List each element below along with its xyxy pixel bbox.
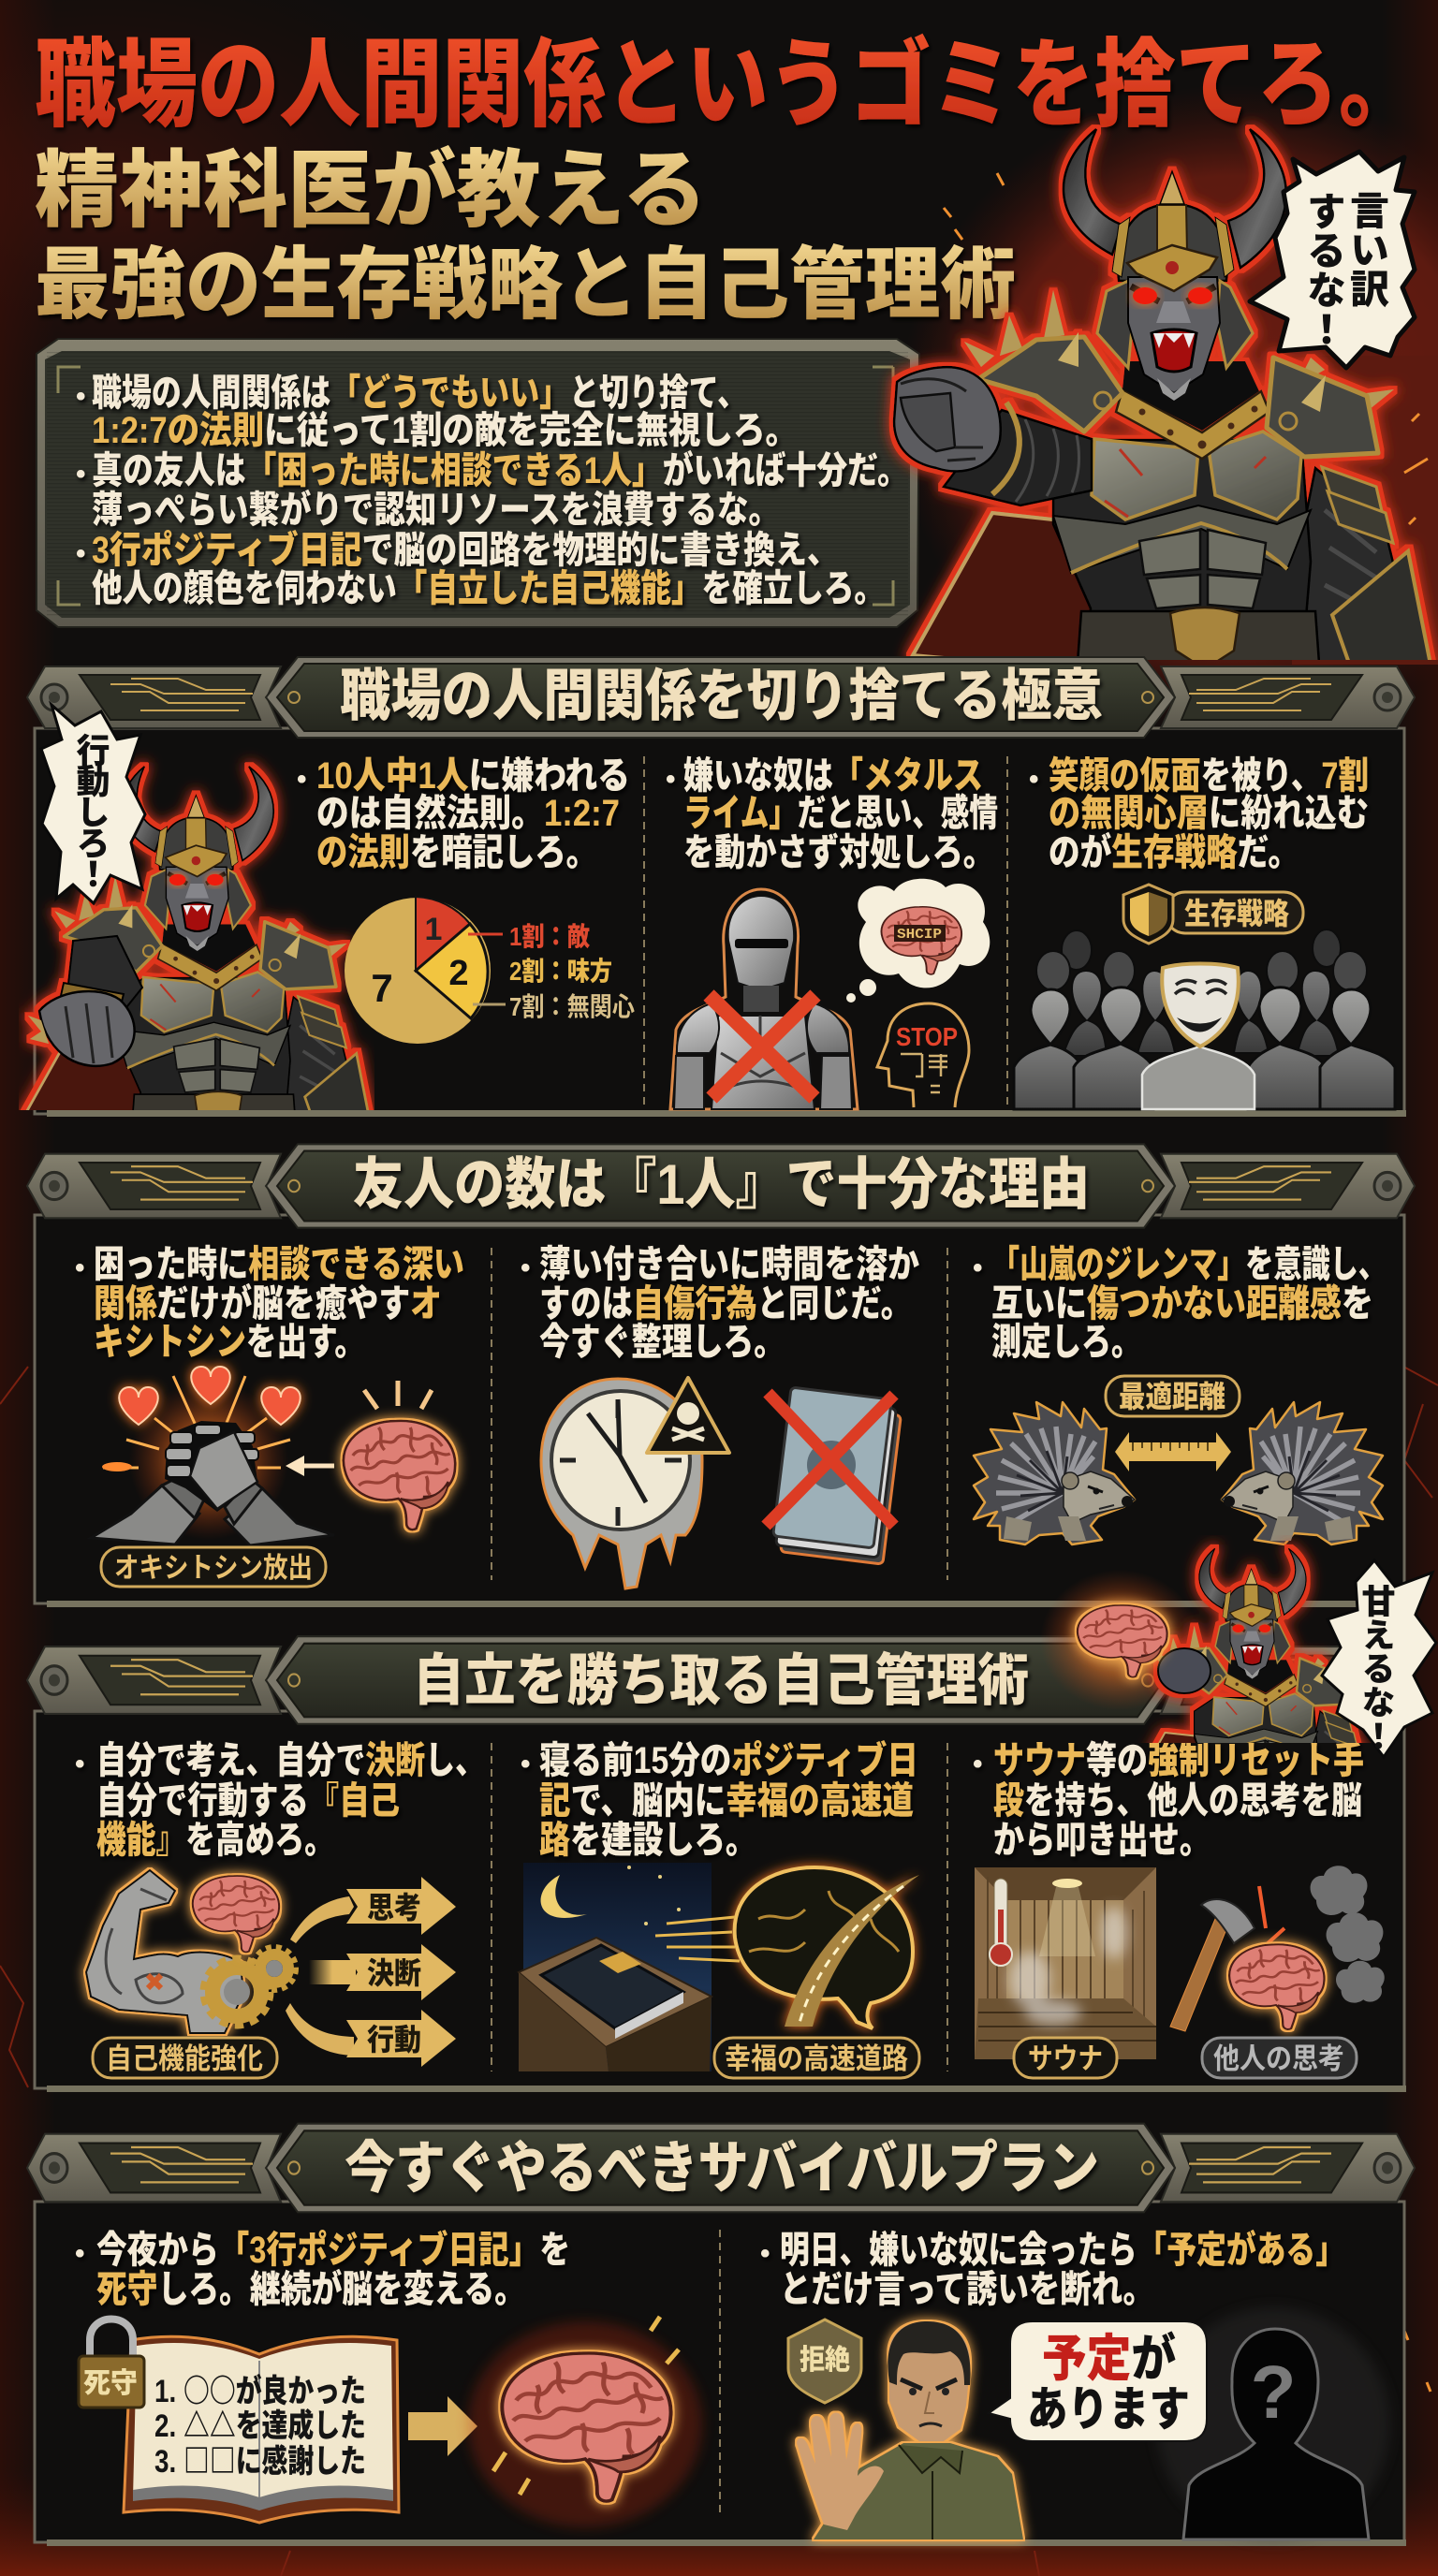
label: サウナ: サウナ (1028, 2042, 1103, 2075)
col 2 text: ライム」だと思い、感情 (683, 793, 998, 834)
summary text: 3行ポジティブ日記で脳の回路を物理的に書き換え、 (92, 529, 839, 571)
title: main headline (35, 31, 1420, 329)
col 3 text: サウナ等の強制リセット手 (993, 1740, 1364, 1781)
col 2 text: 寝る前15分のポジティブ日 (539, 1739, 918, 1781)
icon: head with STOP (877, 1003, 969, 1107)
icon: metal robot crossed out (670, 889, 858, 1109)
col 1 text: のは自然法則。1:2:7 (316, 793, 620, 834)
burst: 行動しろ！: 行動しろ！ (71, 733, 110, 887)
col 1 text: • (75, 1252, 85, 1283)
col 3 text: から叩き出せ。 (993, 1820, 1211, 1861)
col 3 text: 測定しろ。 (991, 1322, 1141, 1363)
icon: thought cloud with brain (846, 879, 990, 1003)
warrior with fist (20, 767, 373, 1138)
icon: thought clouds (1311, 1866, 1385, 2003)
icon: hedgehog right (1222, 1402, 1383, 1544)
label: オキシトシン放出: オキシトシン放出 (114, 1553, 313, 1584)
arrows: 思考 決断 行動 (286, 1877, 456, 2067)
burst: 甘えるな！ (1322, 1560, 1436, 1757)
icon: melting clock (541, 1379, 702, 1588)
summary text (76, 373, 908, 609)
rays above brain (364, 1381, 432, 1409)
col 1 text: 自分で行動する『自己 (96, 1780, 400, 1822)
col 2 text: • (521, 1252, 531, 1283)
col 2 text: 今すぐ整理しろ。 (539, 1322, 785, 1363)
col 2 text (521, 1739, 918, 1861)
left text: 死守しろ。継続が脳を変える。 (96, 2268, 525, 2310)
book lines (154, 2365, 366, 2481)
icon: brain struck (1229, 1944, 1325, 2029)
man raising hand (797, 2321, 1023, 2539)
label: 生存戦略 (1123, 885, 1303, 944)
label: 他人の思考: 他人の思考 (1213, 2042, 1344, 2075)
col 3 text: の無関心層に紛れ込む (1049, 793, 1369, 834)
col 2 text (521, 1244, 919, 1363)
section 3 header: 自立を勝ち取る自己管理術 (413, 1649, 1029, 1712)
col 1 text: 自分で考え、自分で決断し、 (96, 1740, 485, 1781)
section 2 header (27, 1144, 1415, 1228)
section 4 header (27, 2124, 1415, 2212)
col 1 text: 機能』を高めろ。 (96, 1820, 334, 1861)
icon: shield 拒絶: 拒絶 (800, 2345, 850, 2376)
pie chart 1:2:7: 7割：無関心 (509, 992, 635, 1021)
section 1 header (27, 657, 1415, 738)
icon: muscle arm with gears (86, 1870, 296, 2033)
label: 自己機能強化: 自己機能強化 (106, 2042, 263, 2075)
col 2 text: 嫌いな奴は「メタルス (683, 755, 983, 797)
icon: thought cloud with brain: SHCIP (897, 927, 942, 943)
summary text: 1:2:7の法則に従って1割の敵を完全に無視しろ。 (92, 410, 798, 451)
col 3 text: 互いに傷つかない距離感を (991, 1283, 1373, 1325)
col 1 text: の法則を暗記しろ。 (316, 832, 597, 873)
icon: hammer (1170, 1886, 1284, 2031)
col 3 text (973, 1740, 1364, 1861)
summary text: 薄っぺらい繋がりで認知リソースを浪費するな。 (92, 489, 780, 531)
col 1 text: 関係だけが脳を癒やすオ (94, 1282, 442, 1325)
burst: 甘えるな！: 甘えるな！ (1357, 1584, 1395, 1752)
col 1 text: • (297, 764, 307, 795)
section 4 header: 今すぐやるべきサバイバルプラン (345, 2137, 1099, 2200)
pie chart 1:2:7: 7 (371, 966, 393, 1010)
icon: ruler arrow (1115, 1432, 1231, 1471)
col 2 text: を動かさず対処しろ。 (683, 832, 994, 873)
icon: brain (193, 1876, 279, 1952)
section 3 header (27, 1636, 1415, 1724)
summary text: 真の友人は「困った時に相談できる1人」がいれば十分だ。 (92, 449, 908, 491)
icon: brain (344, 1421, 455, 1530)
col 3 text: のが生存戦略だ。 (1049, 831, 1299, 873)
panel: section 3 (27, 1636, 1415, 2092)
illustration: golden brain highway (735, 1867, 919, 2028)
silhouette with question mark: ? (1251, 2350, 1296, 2434)
speech bubble: あります (1027, 2383, 1190, 2436)
title line 3: 最強の生存戦略と自己管理術 (35, 241, 1016, 329)
illustration: sauna (975, 1867, 1156, 2059)
icon: hedgehog left (974, 1402, 1135, 1544)
left text (75, 2229, 570, 2310)
label: サウナ (1014, 2038, 1117, 2078)
icon: warning skull (647, 1378, 729, 1453)
col 1 text (75, 1740, 485, 1861)
label: 最適距離: 最適距離 (1119, 1380, 1225, 1413)
col 1 text: 10人中1人に嫌われる (316, 755, 630, 797)
book lines: 1. ○○が良かった (154, 2365, 366, 2411)
pie chart 1:2:7: 1 (425, 912, 442, 947)
icon: open book (124, 2336, 399, 2523)
right text (760, 2229, 1345, 2310)
col 3 text: 笑顔の仮面を被り、7割 (1049, 755, 1369, 797)
col 2 text: • (521, 1749, 531, 1779)
icon: shield 拒絶 (788, 2320, 861, 2403)
col 3 text (973, 1244, 1387, 1363)
burst text left column: するな！ (1301, 191, 1346, 348)
col 1 text (75, 1244, 464, 1363)
crowd with smiling mask (1014, 929, 1395, 1109)
col 1 text: • (75, 1749, 85, 1779)
panel: section 1 (20, 657, 1415, 1138)
summary text: • (76, 538, 86, 569)
icon: clasped armored hands (91, 1421, 334, 1545)
illustration: warrior with brain (1045, 1535, 1371, 1743)
panel: section 4 (27, 2124, 1415, 2546)
right text: 明日、嫌いな奴に会ったら「予定がある」 (780, 2229, 1345, 2271)
arrows: 思考 決断 行動: 行動 (367, 2023, 421, 2056)
pie chart 1:2:7: 1割：敵 (509, 922, 590, 951)
left text: • (75, 2238, 85, 2269)
arrow (286, 1456, 334, 1476)
summary text: • (76, 381, 86, 412)
speech bubble (989, 2321, 1207, 2441)
col 2 text: 路を建設しろ。 (539, 1820, 756, 1861)
illustration: main warrior pointing (894, 129, 1432, 676)
pie chart 1:2:7 (345, 897, 635, 1044)
speech bubble: 予定が (1042, 2330, 1176, 2387)
icon: crossed cards (766, 1387, 901, 1564)
icon: glowing brain (468, 2317, 702, 2527)
summary text: • (76, 459, 86, 490)
burst: 言い訳するな！ (1250, 152, 1415, 368)
arrows: 思考 決断 行動: 決断 (367, 1956, 421, 1990)
pie chart 1:2:7: 2割：味方 (509, 957, 612, 986)
icon: padlock 死守: 死守 (83, 2368, 138, 2399)
col 3 text (1029, 755, 1369, 873)
summary text: 他人の顔色を伺わない「自立した自己機能」を確立しろ。 (92, 568, 885, 609)
icon: hearts (119, 1367, 301, 1425)
col 3 text: 「山嵐のジレンマ」を意識し、 (991, 1244, 1387, 1285)
icon: padlock 死守 (79, 2320, 144, 2408)
col 2 text: すのは自傷行為と同じだ。 (539, 1283, 912, 1325)
section 2 header: 友人の数は『1人』で十分な理由 (353, 1153, 1090, 1216)
left text: 今夜から「3行ポジティブ日記」を (96, 2229, 570, 2271)
col 2 text: • (666, 764, 676, 795)
pie chart 1:2:7: 2 (448, 954, 469, 993)
col 1 text (297, 755, 630, 873)
burst text right column: 言い訳 (1344, 190, 1389, 308)
panel: section 2 (27, 1144, 1415, 1607)
summary text: 職場の人間関係は「どうでもいい」と切り捨て、 (92, 373, 747, 414)
label: 生存戦略: 生存戦略 (1184, 897, 1289, 930)
col 2 text (666, 755, 998, 873)
right text: とだけ言って誘いを断れ。 (780, 2269, 1154, 2310)
arrow (408, 2396, 477, 2456)
col 3 text: • (973, 1252, 983, 1283)
book lines: 2. △△を達成した (154, 2400, 366, 2446)
panel: summary (37, 339, 919, 627)
silhouette with question mark (1156, 2307, 1390, 2541)
label: 幸福の高速道路: 幸福の高速道路 (725, 2042, 908, 2075)
col 2 text: 薄い付き合いに時間を溶か (539, 1244, 919, 1285)
illustration: night desk and notebook (519, 1863, 712, 2071)
burst: 行動しろ！ (41, 705, 145, 903)
col 3 text: 段を持ち、他人の思考を脳 (993, 1780, 1362, 1822)
title line 2: 精神科医が教える (35, 144, 707, 238)
speed lines (655, 1917, 740, 1961)
section 1 header: 職場の人間関係を切り捨てる極意 (340, 665, 1103, 727)
col 1 text: 困った時に相談できる深い (94, 1244, 464, 1285)
arrows: 思考 決断 行動: 思考 (367, 1891, 421, 1925)
col 1 text: キシトシンを出す。 (94, 1322, 365, 1363)
col 3 text: • (973, 1749, 983, 1779)
book lines: 3. □□に感謝した (154, 2436, 366, 2481)
burst glow behind hands (102, 1376, 290, 1540)
col 3 text: • (1029, 764, 1039, 795)
icon: head with STOP: STOP (896, 1022, 958, 1051)
right text: • (760, 2238, 770, 2269)
col 2 text: 記で、脳内に幸福の高速道 (539, 1780, 914, 1822)
